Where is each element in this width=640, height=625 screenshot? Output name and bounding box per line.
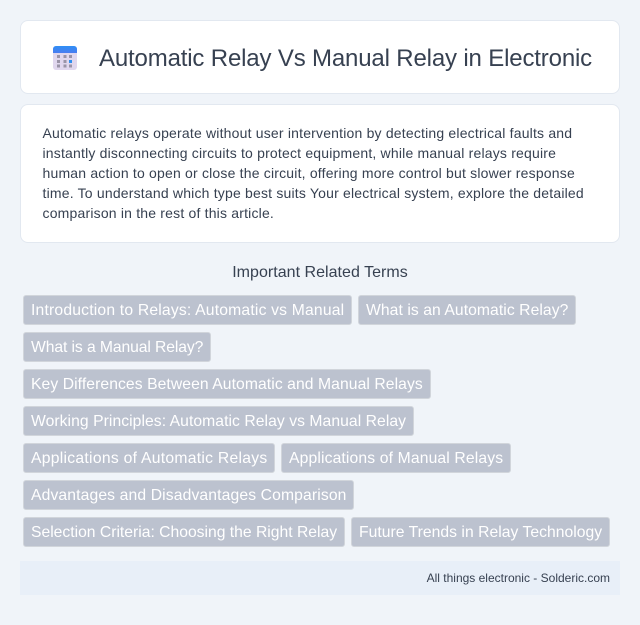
chip: automatic relay [358, 295, 576, 325]
title: Automatic Relay Vs Manual Relay in Electronic [99, 45, 592, 72]
panel: introduction: human action to open or close the circuit, offering more control but slower response [42, 165, 575, 181]
chip: introduction: Introduction to Relays: Automatic vs Manual [31, 302, 344, 319]
chip: manual relay: What is a Manual Relay? [31, 339, 203, 356]
chip: future trends [351, 517, 610, 547]
chip: applications automatic: Applications of Automatic Relays [31, 450, 268, 467]
panel: introduction: time. To understand which type best suits Your electrical system, explore the detailed [42, 185, 584, 201]
text block: intro paragraph [42, 125, 584, 221]
chip: future trends: Future Trends in Relay Technology [359, 524, 602, 541]
panel: introduction: instantly disconnecting circuits to protect equipment, while manual relays require [42, 145, 556, 161]
chip: automatic relay: What is an Automatic Relay? [366, 302, 568, 319]
panel: title header [20, 20, 620, 94]
chip: working principles: Working Principles: Automatic Relay vs Manual Relay [31, 413, 406, 430]
panel: introduction [20, 104, 620, 243]
heading: important related terms: Important Related Terms [232, 264, 408, 281]
chip: selection criteria: Selection Criteria: Choosing the Right Relay [31, 524, 337, 541]
footer bar [20, 561, 620, 595]
panel: introduction: comparison in the rest of this article. [42, 205, 274, 221]
chip: introduction [23, 295, 352, 325]
panel: related term chips [23, 295, 610, 547]
chip: applications automatic [23, 443, 275, 473]
icon: calendar grid [53, 46, 77, 70]
chip: key differences: Key Differences Between Automatic and Manual Relays [31, 376, 423, 393]
text block: intro paragraph: Automatic relays operate without user intervention by detecting electrical faults and [42, 125, 572, 141]
chip: key differences [23, 369, 431, 399]
chip: applications manual: Applications of Manual Relays [289, 450, 503, 467]
chip: selection criteria [23, 517, 345, 547]
chip: advantages: Advantages and Disadvantages Comparison [31, 487, 347, 504]
chip: manual relay [23, 332, 211, 362]
chip: working principles [23, 406, 414, 436]
footer credit: All things electronic - Solderic.com [427, 571, 610, 585]
chip: advantages [23, 480, 354, 510]
chip: applications manual [281, 443, 511, 473]
